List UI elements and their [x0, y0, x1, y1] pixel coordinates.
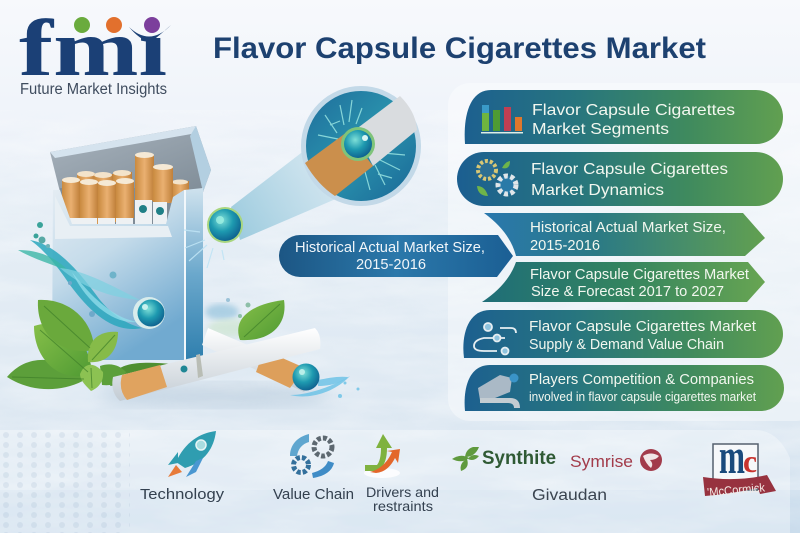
- pack side: [184, 188, 203, 360]
- logo: fmi: [19, 5, 171, 98]
- logo: McCormick: [703, 428, 776, 499]
- panel: right menu backdrop: [448, 83, 800, 421]
- menu: historical chevron: [484, 213, 765, 256]
- icon: gears and leaves: [477, 161, 516, 196]
- illustration: lying cigarette behind: [202, 328, 318, 392]
- mccormick banner: [703, 475, 776, 496]
- text: Market Segments: [532, 121, 669, 138]
- logo tagline: Future Market Insights: [20, 81, 167, 98]
- halftone dots: [0, 432, 130, 533]
- illustration: mint leaves: [7, 300, 285, 391]
- label: Drivers and restraints: Drivers and: [366, 484, 439, 500]
- close-up cigarette paper: [355, 96, 417, 166]
- text: Market Dynamics: [531, 182, 664, 199]
- icon: value chain loop: [474, 323, 516, 354]
- icon: handshake: [478, 374, 520, 408]
- icon: capsule on cigarette: [292, 364, 320, 390]
- symrise globe: [640, 449, 662, 471]
- text: Historical Actual Market Size,: [295, 240, 485, 256]
- label: Givaudan: Givaudan: [532, 487, 607, 504]
- text: 2015-2016: [356, 257, 426, 273]
- label: Drivers and restraints: restraints: [373, 498, 433, 514]
- text: Flavor Capsule Cigarettes: [532, 102, 735, 119]
- text: Flavor Capsule Cigarettes: [531, 161, 728, 178]
- close-up capsule: [341, 127, 375, 161]
- close-up cigarette filter: [305, 132, 373, 196]
- synthite leaf mark: [452, 447, 479, 471]
- mccormick mark: c: [743, 443, 757, 479]
- mccormick mark: m: [719, 428, 745, 484]
- mccormick name: 'McCormick: [706, 480, 766, 499]
- pack lid: [50, 126, 211, 192]
- panel: bottom strip: [0, 430, 790, 533]
- menu: players and companies: [465, 365, 784, 411]
- shadow under cigarettes: [100, 383, 330, 407]
- text: involved in flavor capsule cigarettes market: [529, 390, 756, 404]
- icon: rocket: [168, 431, 216, 477]
- text: Supply & Demand Value Chain: [529, 336, 724, 353]
- text: Flavor Capsule Cigarettes Market: [530, 267, 749, 283]
- icon: glowing capsule: [184, 207, 243, 268]
- icon: drivers and restraints arrows: [364, 434, 400, 478]
- title: Flavor Capsule Cigarettes Market: [213, 32, 706, 65]
- mccormick box: [713, 444, 758, 490]
- menu: supply and demand: [463, 310, 783, 358]
- icon: value chain gears: [290, 434, 334, 478]
- icon: capsule on pack: [133, 297, 165, 329]
- menu: market dynamics: [457, 152, 783, 206]
- text: Players Competition & Companies: [529, 371, 754, 388]
- menu: forecast chevron: [482, 262, 765, 302]
- menu: market segments: [465, 90, 783, 144]
- pack interior: [60, 188, 182, 230]
- illustration: lying cigarette front: [112, 328, 320, 401]
- magnifier cone: [231, 150, 338, 240]
- illustration: splash by right leaf: [205, 298, 256, 337]
- synthite wordmark: Synthite: [482, 448, 556, 469]
- label: Technology: Technology: [140, 486, 225, 503]
- illustration: cigarette pack: [50, 126, 211, 360]
- text: Flavor Capsule Cigarettes Market: [529, 318, 757, 335]
- label: Value Chain: Value Chain: [273, 486, 354, 503]
- pack front: [52, 190, 184, 360]
- illustration: splash under cigarette: [290, 376, 360, 398]
- icon: bar chart: [481, 105, 523, 134]
- logo: Synthite: [452, 447, 556, 471]
- magnifier lens with cigarette close-up: [301, 86, 421, 206]
- callout: historical market size arrow: [279, 235, 513, 277]
- text: Size & Forecast 2017 to 2027: [531, 284, 724, 300]
- logo dots and arc: [74, 17, 171, 42]
- logo: Symrise: [570, 449, 662, 471]
- text: 2015-2016: [530, 238, 600, 254]
- illustration: splash on pack: [18, 222, 142, 329]
- logo letters: fmı: [19, 5, 167, 93]
- text: Historical Actual Market Size,: [530, 220, 726, 236]
- cigarettes in pack: [62, 152, 189, 224]
- symrise wordmark: Symrise: [570, 452, 633, 471]
